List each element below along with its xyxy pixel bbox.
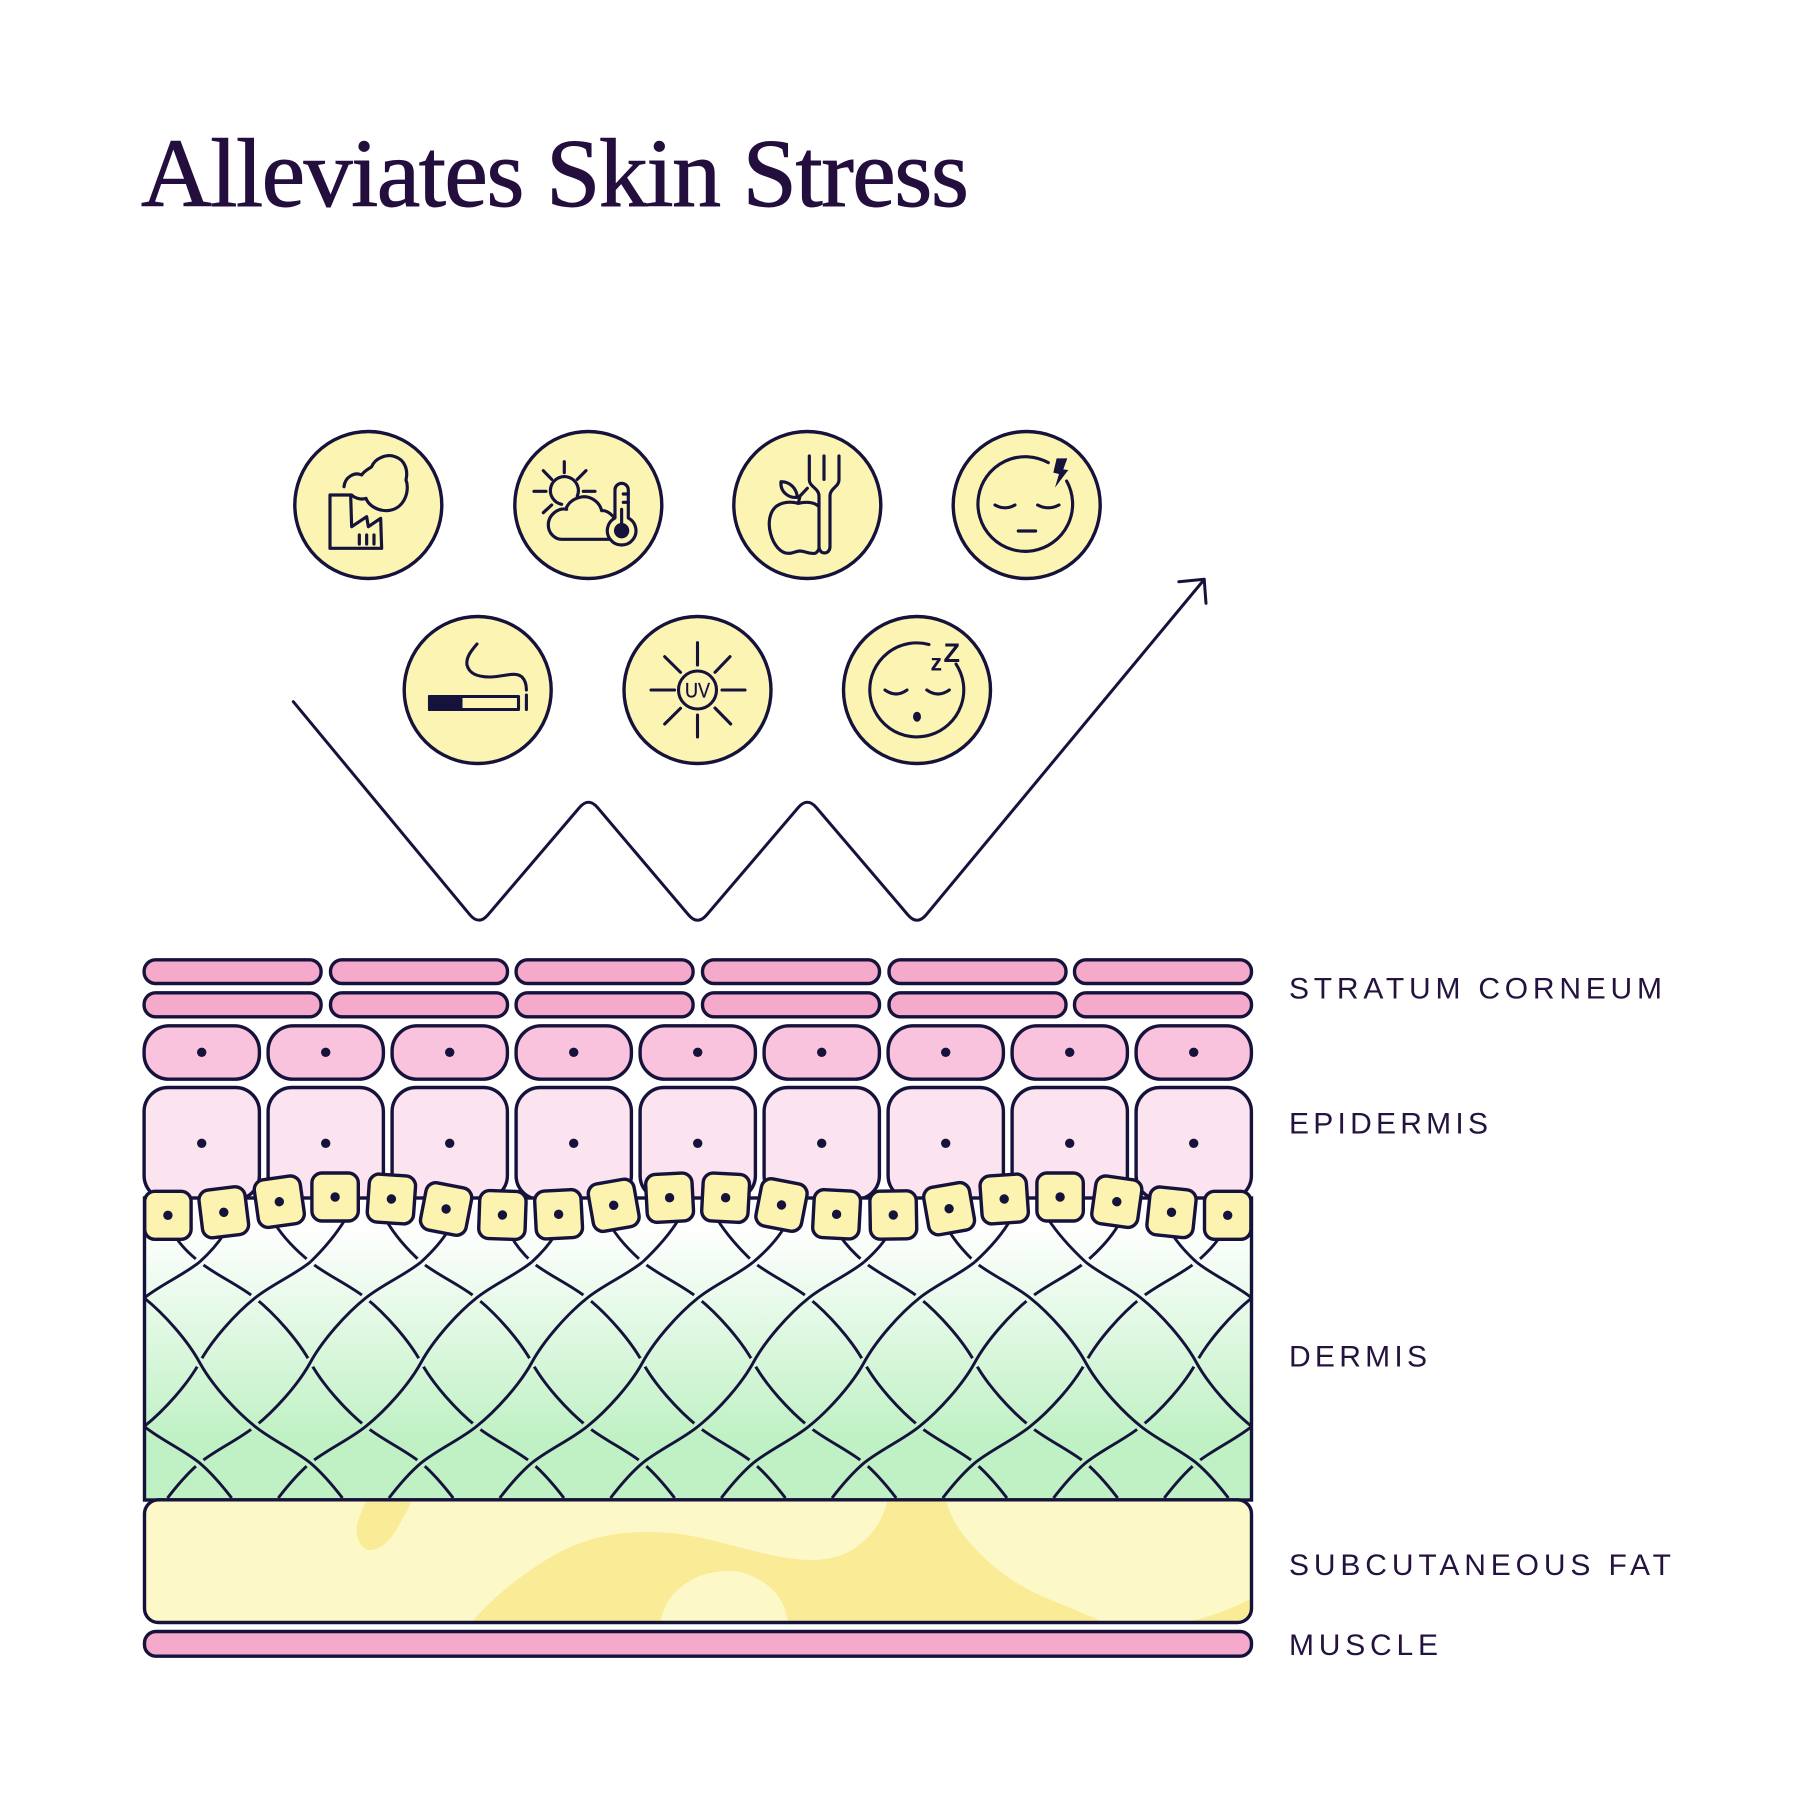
icon: stressed face	[953, 432, 1100, 578]
panel: stressor icons	[295, 432, 1100, 764]
label: subcutaneous fat: SUBCUTANEOUS FAT	[1289, 1549, 1671, 1582]
icon: factory pollution	[295, 432, 442, 578]
panel: skin cross-section	[142, 958, 1254, 1658]
label: stratum corneum: STRATUM CORNEUM	[1289, 973, 1662, 1006]
icon: UV sun	[624, 616, 771, 764]
label: muscle: MUSCLE	[1289, 1629, 1438, 1662]
icon: sleeping face: Z	[944, 638, 960, 668]
stratum corneum cells	[144, 960, 1252, 1017]
dermis background	[144, 1198, 1252, 1500]
title: Alleviates Skin Stress	[141, 120, 969, 228]
icon: UV sun: UV	[685, 680, 710, 702]
arrow: zigzag stress line	[293, 579, 1206, 920]
basal layer yellow cells	[145, 1173, 1251, 1240]
muscle layer	[144, 1632, 1252, 1656]
icon: apple and fork	[734, 432, 881, 578]
subcutaneous fat layer	[144, 1498, 1252, 1624]
icon: weather and temperature	[515, 432, 662, 578]
upper epidermis cells	[144, 1026, 1251, 1079]
icon: sleeping face: z	[930, 650, 942, 676]
layer labels	[1289, 973, 1671, 1662]
icon: cigarette	[404, 616, 551, 764]
dermis collagen mesh	[146, 1222, 1250, 1498]
lower epidermis cells	[144, 1088, 1251, 1200]
lower epidermis nuclei	[197, 1139, 1198, 1148]
label: epidermis: EPIDERMIS	[1289, 1107, 1488, 1140]
upper epidermis nuclei	[197, 1048, 1198, 1057]
icon: sleeping face	[844, 616, 990, 764]
label: dermis: DERMIS	[1289, 1341, 1427, 1374]
